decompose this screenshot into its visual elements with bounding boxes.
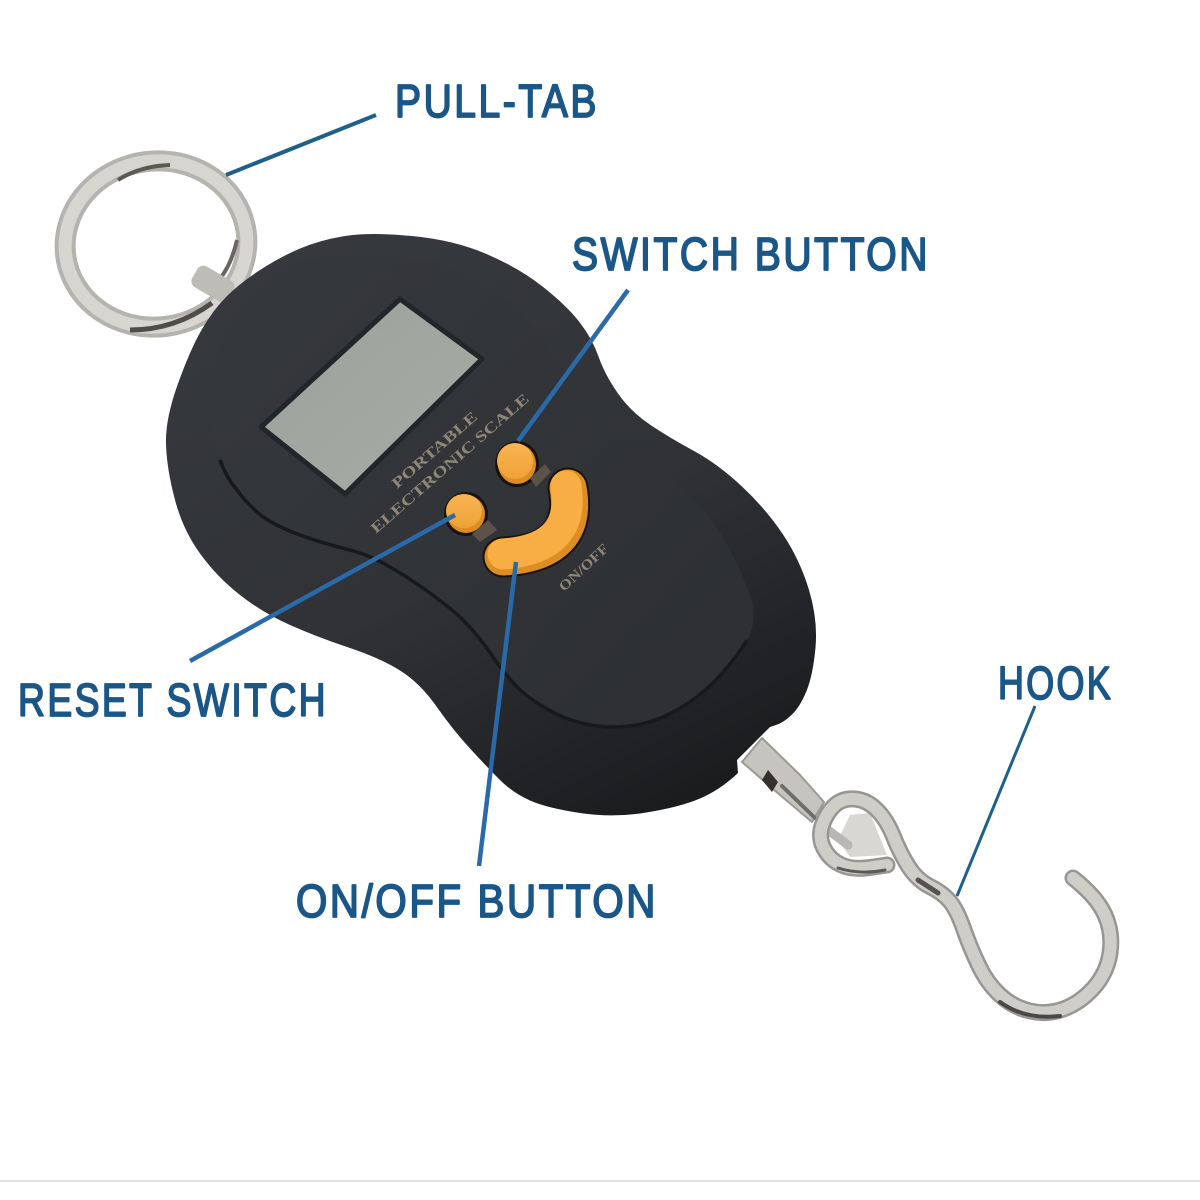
LCD screen: [261, 299, 482, 494]
leader line: switch button: [518, 290, 628, 441]
scale body: [166, 234, 816, 815]
embossed model text: ELECTRONIC SCALE: [368, 391, 533, 537]
swivel clasp and hook: [742, 738, 1111, 1017]
body ridge: [220, 460, 747, 727]
embossed model text: [368, 391, 533, 537]
hook wire: [821, 799, 1111, 1017]
swivel clasp: [742, 738, 887, 857]
leader line: on/off button: [479, 562, 516, 866]
label: hook: HOOK: [998, 657, 1113, 709]
leader line: pull-tab: [226, 115, 376, 175]
switch button: [495, 441, 551, 487]
on/off embossed text: ON/OFF: [556, 542, 612, 595]
label: on/off button: ON/OFF BUTTON: [296, 875, 658, 927]
bottom edge line: [0, 1180, 1200, 1182]
label: switch button: SWITCH BUTTON: [572, 228, 930, 280]
label: pull-tab: PULL-TAB: [395, 75, 599, 127]
leader line: hook: [957, 706, 1035, 896]
label: reset switch: RESET SWITCH: [18, 674, 328, 726]
inner face panel: [211, 254, 753, 727]
leader line: reset switch: [190, 515, 455, 661]
reset button: [444, 492, 497, 542]
on/off smile button: [503, 486, 570, 557]
ring pin: [189, 263, 237, 305]
embossed model text: PORTABLE: [389, 409, 481, 492]
pull-tab ring: [54, 149, 258, 339]
